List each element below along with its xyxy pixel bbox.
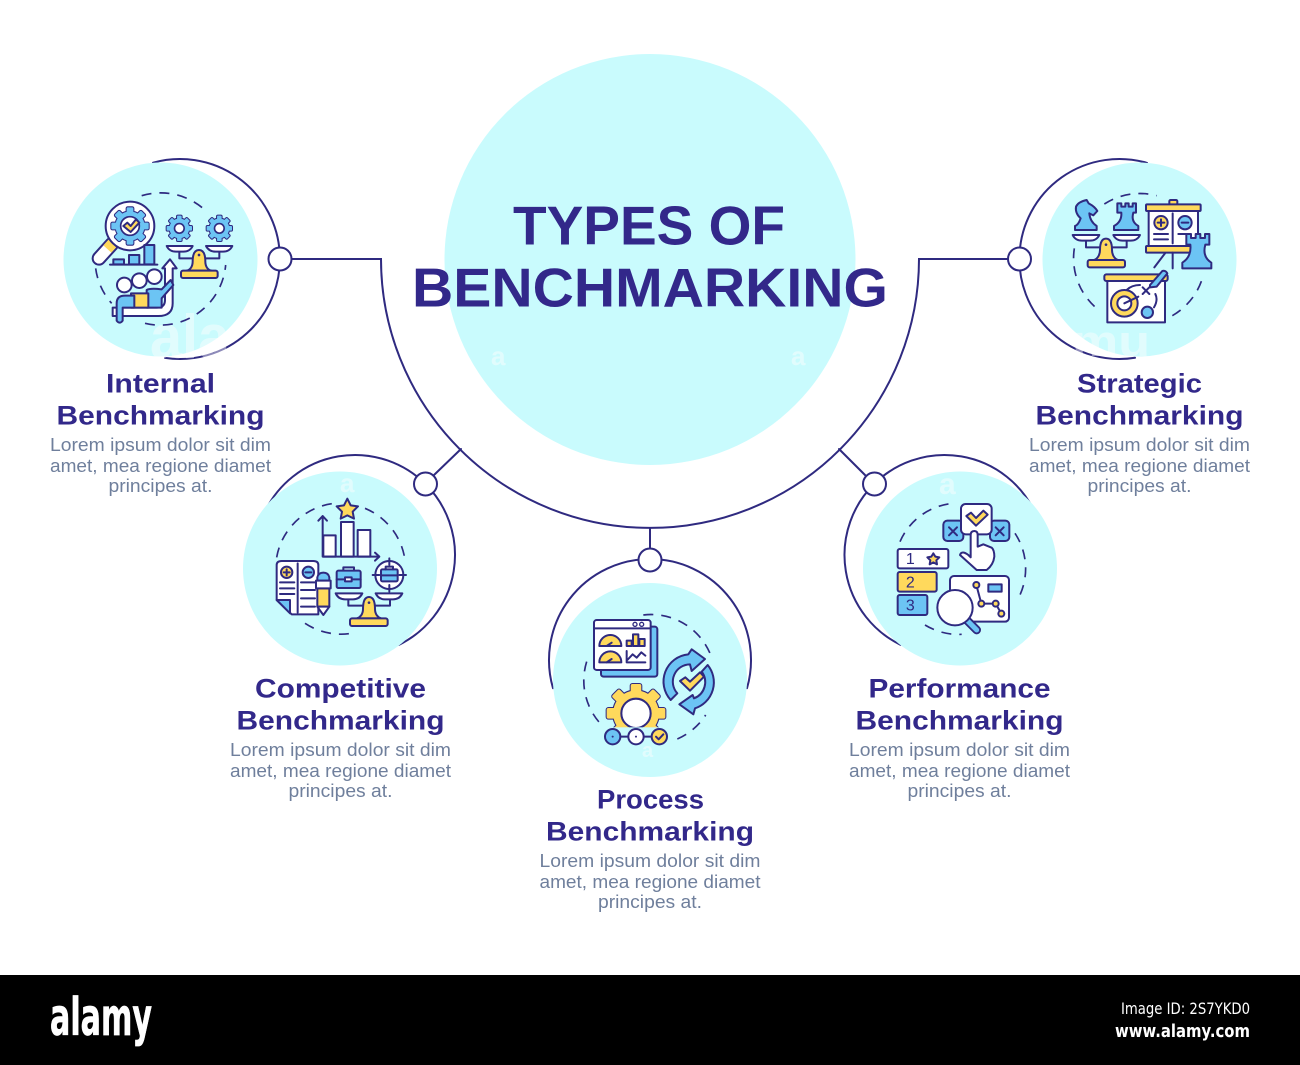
icon: selection cards, ranking and analytics: 2 — [906, 574, 915, 591]
body text: Lorem ipsum dolor sit dim — [849, 740, 1070, 760]
node — [638, 548, 662, 572]
tinted circle — [243, 472, 437, 666]
body text: principes at. — [288, 781, 392, 801]
body text: amet, mea regione diamet — [50, 456, 271, 476]
body text: Lorem ipsum dolor sit dim — [540, 851, 760, 871]
tinted circle — [863, 472, 1057, 666]
panel: competitive benchmarking — [230, 455, 455, 801]
body text — [849, 740, 1070, 801]
body text: principes at. — [908, 781, 1012, 801]
watermark fragment: ala — [150, 303, 230, 372]
connector arc linking the five types — [292, 259, 1008, 549]
heading: Internal — [106, 368, 215, 398]
watermark fragments on central circle: a — [491, 341, 506, 371]
node — [863, 472, 886, 496]
panel: strategic benchmarking — [1008, 159, 1250, 496]
heading: Benchmarking — [546, 816, 754, 846]
footer bar — [0, 975, 1300, 1065]
outline ring — [1019, 159, 1147, 359]
heading — [1036, 368, 1244, 430]
outline ring — [549, 559, 751, 688]
body text: Lorem ipsum dolor sit dim — [50, 435, 271, 455]
body text — [540, 851, 760, 912]
title: TYPES OF — [513, 194, 785, 256]
panel: process benchmarking — [540, 548, 760, 912]
panel: performance benchmarking — [845, 455, 1070, 801]
footer url: www.alamy.com — [1115, 1021, 1250, 1042]
body text — [50, 435, 271, 496]
heading — [546, 784, 754, 846]
heading: Benchmarking — [56, 400, 264, 430]
icon: chess pieces, scale, strategy boards — [1073, 194, 1211, 322]
watermark fragment: a — [340, 468, 355, 498]
tinted circle — [64, 162, 258, 356]
body text: amet, mea regione diamet — [230, 761, 451, 781]
heading: Competitive — [255, 674, 426, 704]
watermark fragment: mu — [1072, 317, 1150, 366]
heading: Benchmarking — [1036, 400, 1244, 430]
icon: dashboard, cycle arrows and gear — [584, 615, 714, 746]
icon: selection cards, ranking and analytics — [898, 503, 1026, 634]
heading — [56, 368, 264, 430]
node — [1008, 248, 1031, 270]
heading: Benchmarking — [856, 706, 1064, 736]
body text: amet, mea regione diamet — [1029, 456, 1250, 476]
watermark fragments on central circle: a — [791, 341, 806, 371]
body text — [230, 740, 451, 801]
heading — [856, 674, 1064, 736]
node — [268, 248, 292, 270]
body text: Lorem ipsum dolor sit dim — [1029, 435, 1250, 455]
icon: selection cards, ranking and analytics: 1 — [906, 551, 915, 568]
icon: magnifier, gears, scale and team — [96, 193, 232, 325]
watermark fragment: a — [939, 468, 956, 501]
footer logo: alamy — [50, 988, 152, 1048]
tinted circle — [553, 583, 747, 777]
body text: amet, mea regione diamet — [540, 872, 760, 892]
body text: Lorem ipsum dolor sit dim — [230, 740, 451, 760]
heading: Process — [597, 784, 704, 814]
heading: Strategic — [1077, 368, 1202, 398]
heading: Benchmarking — [236, 706, 444, 736]
watermark fragment: a — [642, 740, 654, 762]
body text: amet, mea regione diamet — [849, 761, 1070, 781]
footer image id: Image ID: 2S7YKD0 — [1121, 999, 1250, 1018]
body text: principes at. — [108, 476, 212, 496]
central circle — [444, 54, 856, 465]
icon: selection cards, ranking and analytics: 3 — [906, 598, 915, 615]
title — [412, 194, 888, 318]
title: BENCHMARKING — [412, 256, 888, 318]
node — [414, 472, 437, 496]
outline ring — [265, 455, 455, 645]
tinted circle — [1042, 162, 1236, 356]
outline ring — [845, 455, 1034, 645]
body text: principes at. — [1088, 476, 1192, 496]
outline ring — [153, 159, 280, 359]
watermark fragments on central circle — [491, 341, 806, 371]
body text — [1029, 435, 1250, 496]
panel: internal benchmarking — [50, 159, 292, 496]
heading: Performance — [868, 674, 1050, 704]
heading — [236, 674, 444, 736]
icon: bar chart, document, briefcases and scale — [277, 499, 406, 634]
body text: principes at. — [598, 892, 702, 912]
